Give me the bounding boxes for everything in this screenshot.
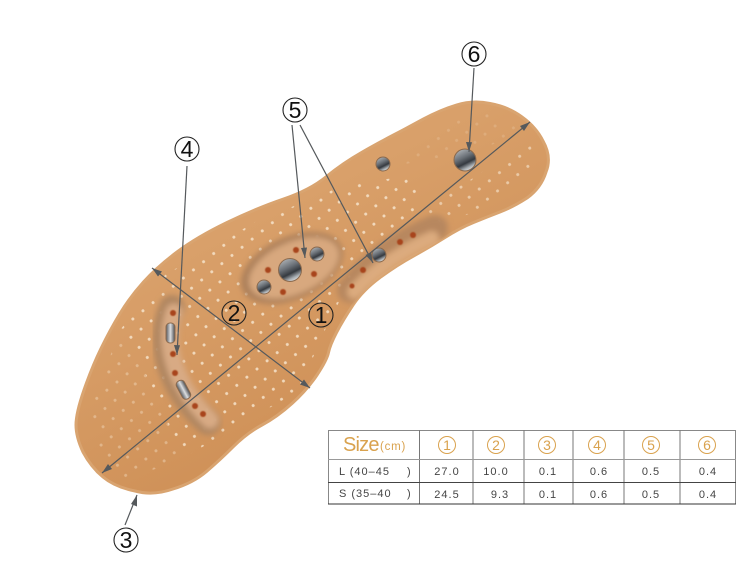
table rows: 0.1 xyxy=(539,466,557,478)
label 2: 2 xyxy=(228,300,240,326)
table header: 5 xyxy=(647,437,655,453)
table header: 4 xyxy=(593,437,601,453)
table rows: L (40–45 xyxy=(339,466,390,478)
red holes xyxy=(170,232,416,417)
label 5 xyxy=(283,97,307,123)
table rows: 0.5 xyxy=(642,466,660,478)
table rows: ) xyxy=(407,466,412,478)
arrow 2: width xyxy=(152,268,310,388)
table header: Size xyxy=(343,434,379,456)
label 1: 1 xyxy=(315,302,327,328)
table rows: 0.5 xyxy=(642,489,660,501)
label 4 xyxy=(175,136,199,162)
label 5: 5 xyxy=(289,97,301,123)
table header: 2 xyxy=(492,437,500,453)
label 3 xyxy=(114,527,138,553)
table rows: 10.0 xyxy=(483,466,509,478)
arrow 1: length xyxy=(102,122,530,473)
table rows: 0.6 xyxy=(590,489,608,501)
table grid xyxy=(328,430,736,504)
table rows: 0.4 xyxy=(699,466,717,478)
arch pad xyxy=(238,230,345,307)
arrow 3: thickness xyxy=(125,495,137,525)
label 3: 3 xyxy=(120,527,132,553)
label 6: 6 xyxy=(468,41,480,67)
table rows: 9.3 xyxy=(491,489,509,501)
table rows: 27.0 xyxy=(434,466,460,478)
label 1 xyxy=(309,302,333,328)
arrow 6 xyxy=(466,68,474,152)
label 6 xyxy=(462,41,486,67)
table rows: 0.4 xyxy=(699,489,717,501)
dimension arrows xyxy=(102,68,530,525)
label 4: 4 xyxy=(181,136,194,162)
table rows xyxy=(339,466,717,501)
arrows 5 xyxy=(292,125,373,263)
table header: 1 xyxy=(443,437,451,453)
table rows: 0.6 xyxy=(590,466,608,478)
table rows: ) xyxy=(407,488,412,500)
label 2 xyxy=(222,300,246,326)
magnets xyxy=(166,149,476,401)
table rows: 24.5 xyxy=(434,489,460,501)
arrow 4 xyxy=(174,166,187,355)
circled labels xyxy=(114,41,486,553)
table header: 3 xyxy=(543,437,551,453)
perforation dots xyxy=(120,175,420,460)
table header: (cm) xyxy=(380,441,406,453)
side pad xyxy=(350,228,435,292)
table rows: S (35–40 xyxy=(339,488,392,500)
size table xyxy=(328,430,736,504)
insole xyxy=(76,102,548,493)
table header xyxy=(343,434,716,456)
metatarsal pad xyxy=(166,308,210,422)
table header: 6 xyxy=(703,437,711,453)
table rows: 0.1 xyxy=(539,489,557,501)
